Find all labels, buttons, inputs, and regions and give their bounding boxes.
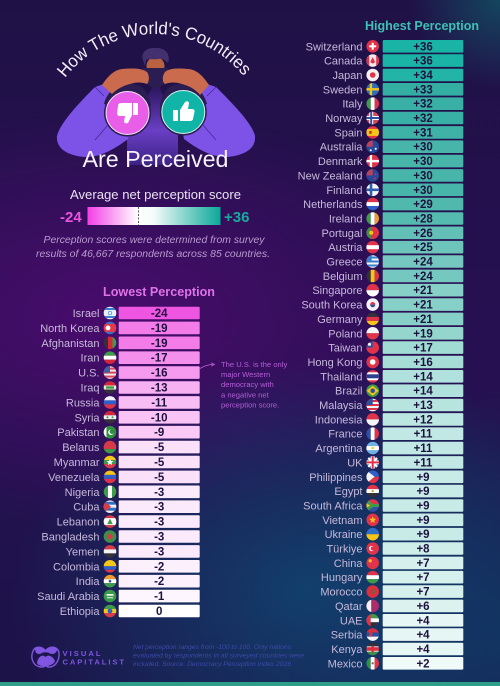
row: Spain bbox=[334, 125, 463, 139]
row: Malaysia bbox=[319, 398, 463, 412]
hands bbox=[102, 68, 209, 95]
row: Denmark: Denmark bbox=[318, 156, 363, 168]
row: Norway: +32 bbox=[413, 113, 433, 125]
row: South Korea bbox=[301, 298, 463, 312]
row: Colombia: Colombia bbox=[53, 561, 100, 573]
row: Pakistan: Pakistan bbox=[57, 427, 100, 439]
row: Lebanon bbox=[57, 515, 200, 529]
row: Iraq: Iraq bbox=[81, 382, 100, 394]
row: Netherlands: +29 bbox=[413, 199, 433, 211]
row: Hong Kong: +16 bbox=[413, 357, 433, 369]
row: Iran: -17 bbox=[151, 353, 168, 365]
row: Finland: Finland bbox=[326, 185, 362, 197]
row: Serbia: +4 bbox=[416, 630, 430, 642]
row: North Korea bbox=[40, 321, 200, 335]
row: Netherlands bbox=[303, 197, 463, 211]
row: Cuba: Cuba bbox=[73, 502, 100, 514]
row: Malaysia: Malaysia bbox=[319, 400, 363, 412]
callout text: The U.S. is the only bbox=[221, 360, 287, 369]
row: Spain: +31 bbox=[413, 127, 433, 139]
arm creases bbox=[95, 87, 216, 140]
row: Nigeria: -3 bbox=[154, 487, 164, 499]
row: Yemen bbox=[66, 544, 200, 558]
row: Kenya: Kenya bbox=[331, 644, 363, 656]
row: Hungary: Hungary bbox=[321, 572, 363, 584]
row: Norway: Norway bbox=[325, 113, 363, 125]
row: Canada: +36 bbox=[413, 56, 433, 68]
row: Thailand: +14 bbox=[413, 371, 433, 383]
row: India: -2 bbox=[154, 576, 164, 588]
row: Taiwan: +17 bbox=[413, 343, 433, 355]
title bottom: Are Perceived bbox=[82, 146, 228, 172]
row: Iran: Iran bbox=[81, 353, 100, 365]
row: Ethiopia: 0 bbox=[156, 606, 162, 618]
row: Austria: Austria bbox=[328, 242, 363, 254]
row: Philippines bbox=[309, 470, 463, 484]
row: U.S.: U.S. bbox=[78, 368, 100, 380]
row: Poland bbox=[328, 326, 463, 340]
row: Afghanistan bbox=[41, 336, 200, 350]
row: Mexico bbox=[328, 656, 463, 670]
row: Indonesia bbox=[315, 412, 463, 426]
row: Nigeria: Nigeria bbox=[65, 487, 100, 499]
description: Perception scores were determined from survey bbox=[44, 235, 266, 246]
row: Bangladesh: Bangladesh bbox=[41, 532, 100, 544]
legend scale: -24 bbox=[60, 209, 82, 226]
row: Netherlands: Netherlands bbox=[303, 199, 363, 211]
row: Israel bbox=[73, 306, 200, 320]
row: Iran bbox=[81, 351, 200, 365]
row: Türkiye: Türkiye bbox=[326, 544, 362, 556]
row: Belgium: +24 bbox=[413, 271, 433, 283]
row: Syria: Syria bbox=[74, 412, 100, 424]
row: Syria bbox=[74, 410, 200, 424]
row: Qatar: +6 bbox=[416, 601, 430, 613]
row: Austria bbox=[328, 240, 463, 254]
row: Afghanistan: Afghanistan bbox=[41, 338, 100, 350]
illustration: person with binoculars bbox=[57, 48, 255, 165]
row: New Zealand: +30 bbox=[413, 170, 433, 182]
row: Switzerland: +36 bbox=[413, 41, 433, 53]
binocular body bbox=[104, 68, 207, 112]
source note: Net perception ranges from -100 to 100. Only nations bbox=[133, 644, 292, 651]
title arc: How The World's Countries bbox=[56, 21, 250, 77]
row: Canada bbox=[324, 54, 463, 68]
row: Poland: +19 bbox=[413, 328, 433, 340]
row: Belarus: -5 bbox=[154, 442, 165, 454]
row: Israel: Israel bbox=[73, 308, 100, 320]
left arm bbox=[57, 84, 135, 157]
row: Colombia: -2 bbox=[154, 561, 164, 573]
row: U.S.: -16 bbox=[151, 368, 168, 380]
row: Taiwan bbox=[328, 341, 463, 355]
row: Kenya: +4 bbox=[416, 644, 430, 656]
row: Finland: +30 bbox=[413, 185, 433, 197]
row: Saudi Arabia: -1 bbox=[154, 591, 165, 603]
row: Denmark bbox=[318, 154, 463, 168]
row: Serbia: Serbia bbox=[331, 630, 363, 642]
torso bbox=[127, 88, 178, 165]
row: UAE: +4 bbox=[416, 615, 430, 627]
legend title: Average net perception score bbox=[70, 188, 241, 202]
row: France: France bbox=[328, 429, 362, 441]
row: China bbox=[334, 556, 463, 570]
heading: highest: Highest Perception bbox=[365, 18, 479, 33]
row: UK: UK bbox=[347, 457, 363, 469]
row: UAE: UAE bbox=[340, 615, 362, 627]
row: Sweden bbox=[323, 82, 463, 96]
row: Greece: Greece bbox=[326, 256, 362, 268]
row: Italy: Italy bbox=[342, 99, 363, 111]
row: Vietnam: +9 bbox=[416, 515, 430, 527]
row: Brazil: +14 bbox=[413, 386, 433, 398]
row: Australia bbox=[320, 140, 463, 154]
row: China: +7 bbox=[416, 558, 430, 570]
row: Indonesia: Indonesia bbox=[315, 414, 363, 426]
row: Portugal: Portugal bbox=[322, 228, 362, 240]
row: Portugal bbox=[322, 226, 463, 240]
row: Ireland: +28 bbox=[413, 214, 433, 226]
row: Germany: Germany bbox=[317, 314, 363, 326]
row: Afghanistan: -19 bbox=[151, 338, 168, 350]
row: Ireland bbox=[329, 212, 463, 226]
row: Pakistan: -9 bbox=[154, 427, 164, 439]
row: Russia: Russia bbox=[66, 397, 100, 409]
row: Belarus: Belarus bbox=[62, 442, 100, 454]
row: Thailand bbox=[320, 369, 463, 383]
row: Italy: +32 bbox=[413, 99, 433, 111]
row: Philippines: +9 bbox=[416, 472, 430, 484]
row: Belgium: Belgium bbox=[323, 271, 362, 283]
row: Japan: Japan bbox=[333, 70, 362, 82]
row: Iraq: -13 bbox=[151, 382, 168, 394]
row: Denmark: +30 bbox=[413, 156, 433, 168]
row: South Korea: South Korea bbox=[301, 300, 363, 312]
row: Lebanon: Lebanon bbox=[57, 517, 100, 529]
row: Singapore: +21 bbox=[413, 285, 433, 297]
callout text: democracy with bbox=[221, 380, 274, 389]
row: Greece bbox=[326, 254, 463, 268]
row: Malaysia: +13 bbox=[413, 400, 433, 412]
row: Iraq bbox=[81, 380, 200, 394]
row: Sweden: +33 bbox=[413, 84, 433, 96]
bottom band bbox=[0, 682, 500, 686]
row: Belgium bbox=[323, 269, 463, 283]
row: UAE bbox=[340, 613, 463, 627]
description: results of 46,667 respondents across 85 countries. bbox=[36, 249, 270, 260]
row: India: India bbox=[76, 576, 100, 588]
row: Singapore: Singapore bbox=[312, 285, 362, 297]
row: India bbox=[76, 574, 200, 588]
row: Sweden: Sweden bbox=[323, 84, 362, 96]
row: Ethiopia bbox=[60, 604, 200, 618]
row: Syria: -10 bbox=[151, 412, 168, 424]
row: Argentina: +11 bbox=[414, 443, 433, 455]
row: Kenya bbox=[331, 642, 463, 656]
row: Qatar bbox=[335, 599, 463, 613]
row: Mexico: +2 bbox=[416, 658, 430, 670]
row: UK bbox=[347, 455, 463, 469]
logo text: VISUAL bbox=[62, 649, 101, 658]
row: U.S. bbox=[78, 366, 200, 380]
arrow bbox=[200, 363, 214, 368]
row: New Zealand bbox=[298, 168, 463, 182]
logo: Visual Capitalist bbox=[32, 647, 124, 667]
row: Ukraine: +9 bbox=[416, 529, 430, 541]
row: Indonesia: +12 bbox=[413, 414, 433, 426]
row: Vietnam bbox=[322, 513, 463, 527]
row: Germany: +21 bbox=[413, 314, 433, 326]
row: Cuba: -3 bbox=[154, 502, 164, 514]
row: Greece: +24 bbox=[413, 256, 433, 268]
logo text: CAPITALIST bbox=[62, 657, 124, 666]
callout text: a negative net bbox=[221, 390, 270, 399]
head bbox=[142, 48, 169, 75]
row: Myanmar bbox=[54, 455, 200, 469]
row: Yemen: -3 bbox=[154, 546, 164, 558]
row: Nigeria bbox=[65, 485, 200, 499]
row: Russia bbox=[66, 395, 200, 409]
legend scale: +36 bbox=[224, 209, 249, 226]
row: UK: +11 bbox=[414, 457, 433, 469]
row: Norway bbox=[325, 111, 463, 125]
right arm bbox=[176, 84, 255, 157]
row: Mexico: Mexico bbox=[328, 658, 362, 670]
row: Argentina bbox=[315, 441, 463, 455]
row: North Korea: -19 bbox=[151, 323, 168, 335]
panel: highest perception bbox=[298, 18, 479, 670]
row: Spain: Spain bbox=[334, 127, 362, 139]
row: Finland bbox=[326, 183, 463, 197]
row: France bbox=[328, 427, 463, 441]
row: Egypt bbox=[334, 484, 463, 498]
row: Bangladesh bbox=[41, 530, 200, 544]
row: Switzerland bbox=[306, 39, 463, 53]
source note: included. Source: Democracy Perception Index 2026 bbox=[133, 661, 291, 668]
row: Myanmar: -5 bbox=[154, 457, 165, 469]
row: South Africa: South Africa bbox=[303, 500, 363, 512]
row: Hungary bbox=[321, 570, 463, 584]
row: Hungary: +7 bbox=[416, 572, 430, 584]
row: Brazil bbox=[335, 384, 463, 398]
callout text: major Western bbox=[221, 370, 270, 379]
row: Australia: Australia bbox=[320, 142, 363, 154]
row: Belarus bbox=[62, 440, 200, 454]
row: Türkiye: +8 bbox=[416, 544, 430, 556]
legend scale bbox=[60, 207, 249, 226]
row: Venezuela: Venezuela bbox=[48, 472, 100, 484]
callout: U.S. note bbox=[200, 360, 287, 410]
row: Venezuela bbox=[48, 470, 200, 484]
logo mark bbox=[32, 647, 59, 667]
row: Yemen: Yemen bbox=[66, 546, 100, 558]
row: Switzerland: Switzerland bbox=[306, 41, 362, 53]
source note: evaluated by respondents in all surveyed countries were bbox=[133, 653, 304, 660]
lens: thumbs up bbox=[160, 88, 207, 136]
row: Bangladesh: -3 bbox=[154, 532, 164, 544]
callout text: perception score. bbox=[221, 401, 279, 410]
row: Myanmar: Myanmar bbox=[54, 457, 100, 469]
row: Colombia bbox=[53, 559, 200, 573]
row: Japan: +34 bbox=[413, 70, 433, 82]
row: Argentina: Argentina bbox=[315, 443, 363, 455]
row: Israel: -24 bbox=[151, 308, 168, 320]
row: Brazil: Brazil bbox=[335, 386, 362, 398]
row: Türkiye bbox=[326, 542, 463, 556]
row: New Zealand: New Zealand bbox=[298, 170, 362, 182]
row: Egypt: Egypt bbox=[334, 486, 362, 498]
panel: lowest perception bbox=[37, 284, 215, 618]
row: Portugal: +26 bbox=[413, 228, 433, 240]
row: South Africa: +9 bbox=[416, 500, 430, 512]
row: Canada: Canada bbox=[324, 56, 363, 68]
row: Morocco: Morocco bbox=[320, 587, 362, 599]
row: Italy bbox=[342, 97, 463, 111]
row: Serbia bbox=[331, 628, 463, 642]
row: Hong Kong: Hong Kong bbox=[307, 357, 362, 369]
row: France: +11 bbox=[414, 429, 433, 441]
row: Thailand: Thailand bbox=[320, 371, 362, 383]
row: North Korea: North Korea bbox=[40, 323, 100, 335]
row: South Korea: +21 bbox=[413, 300, 433, 312]
row: Taiwan: Taiwan bbox=[328, 343, 362, 355]
row: Japan bbox=[333, 68, 463, 82]
row: Germany bbox=[317, 312, 463, 326]
row: Saudi Arabia: Saudi Arabia bbox=[37, 591, 100, 603]
heading: lowest: Lowest Perception bbox=[103, 284, 215, 299]
row: Austria: +25 bbox=[413, 242, 433, 254]
row: South Africa bbox=[303, 498, 463, 512]
row: Poland: Poland bbox=[328, 328, 362, 340]
row: Cuba bbox=[73, 500, 200, 514]
row: Pakistan bbox=[57, 425, 200, 439]
row: Australia: +30 bbox=[413, 142, 433, 154]
row: Saudi Arabia bbox=[37, 589, 200, 603]
row: Morocco bbox=[320, 585, 463, 599]
row: Ethiopia: Ethiopia bbox=[60, 606, 100, 618]
row: Hong Kong bbox=[307, 355, 463, 369]
lens: thumbs down bbox=[104, 90, 151, 136]
row: Philippines: Philippines bbox=[309, 472, 363, 484]
row: Egypt: +9 bbox=[416, 486, 430, 498]
row: Qatar: Qatar bbox=[335, 601, 363, 613]
row: Morocco: +7 bbox=[416, 587, 430, 599]
row: Singapore bbox=[312, 283, 463, 297]
row: Vietnam: Vietnam bbox=[322, 515, 362, 527]
row: Ukraine: Ukraine bbox=[325, 529, 362, 541]
row: Ireland: Ireland bbox=[329, 214, 362, 226]
row: Russia: -11 bbox=[151, 397, 168, 409]
row: Ukraine bbox=[325, 527, 463, 541]
row: Lebanon: -3 bbox=[154, 517, 164, 529]
row: Venezuela: -5 bbox=[154, 472, 165, 484]
row: China: China bbox=[334, 558, 363, 570]
